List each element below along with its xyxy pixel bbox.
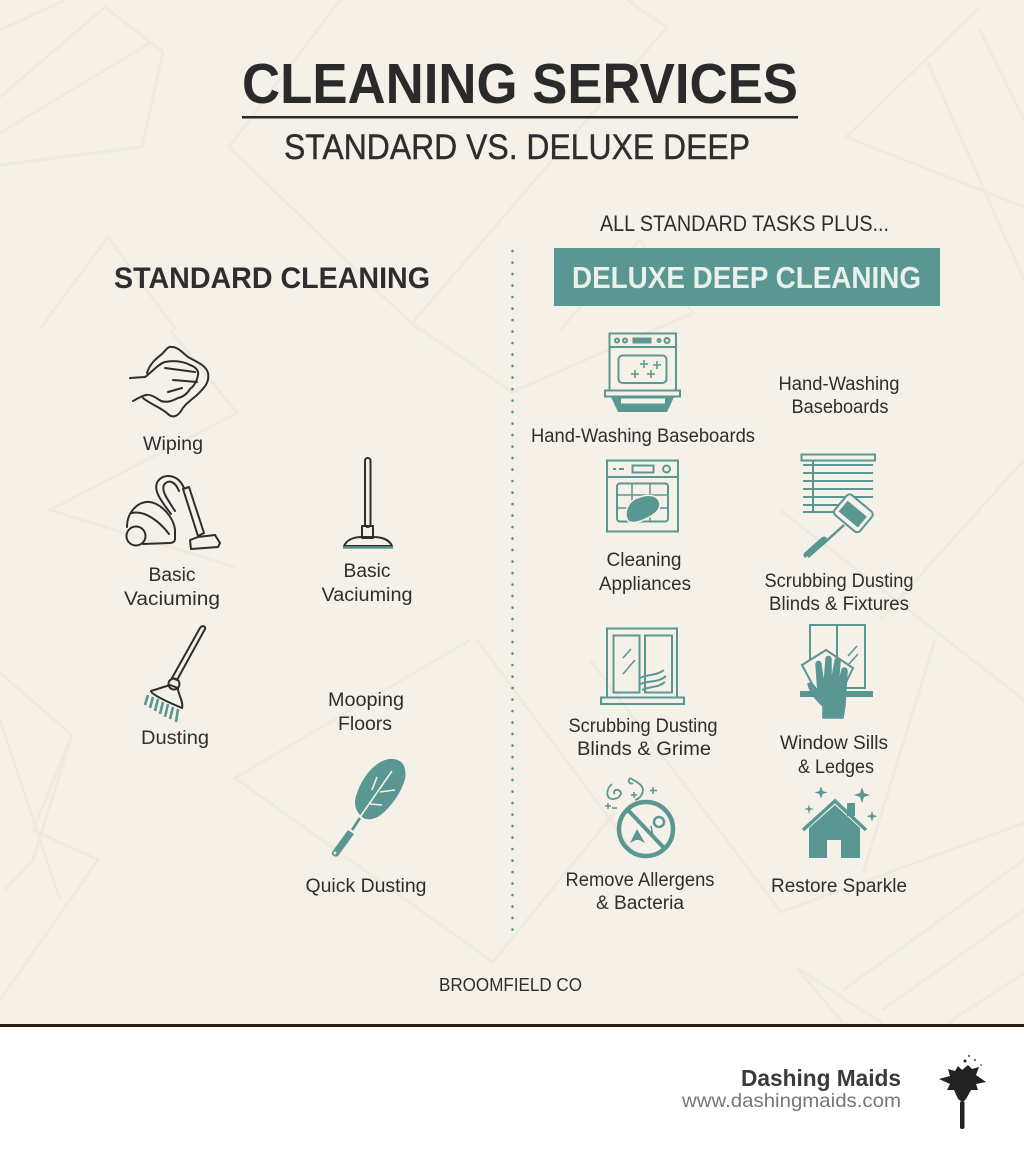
title: CLEANING SERVICES (242, 52, 798, 116)
brand name: Dashing Maids (741, 1065, 901, 1091)
icon: allergen prohibition (605, 778, 673, 856)
icon: floor mop (343, 458, 393, 548)
icon: feather duster (332, 760, 404, 857)
title underline (242, 116, 798, 118)
label: hand-washing baseboards, second: Hand-Washing (778, 374, 900, 395)
heading banner: deluxe deep cleaning (554, 248, 940, 306)
icon: window with cloth (601, 628, 684, 704)
label: dusting: Dusting (141, 728, 209, 749)
panel: standard cleaning items (124, 347, 426, 897)
dotted divider (511, 251, 514, 932)
label: scrubbing dusting blinds and fixtures: Scrubbing Dusting (764, 571, 914, 592)
icon: oven with scrubbing hand (607, 460, 678, 532)
label: cleaning appliances: Appliances (599, 574, 691, 595)
icon: wiping hand and cloth (130, 347, 208, 416)
label: cleaning appliances (599, 550, 691, 595)
label: scrubbing dusting blinds and fixtures (764, 571, 914, 615)
icon: hand wiping window sill (800, 625, 873, 718)
label: remove allergens and bacteria (566, 870, 714, 914)
label: basic vacuuming, second (322, 561, 412, 606)
label: cleaning appliances: Cleaning (606, 550, 682, 571)
label: mopping floors: Mooping (328, 690, 404, 711)
caption: all standard tasks plus: ALL STANDARD TASKS PLUS... (600, 211, 889, 236)
label: hand-washing baseboards, second (778, 374, 900, 418)
heading banner: deluxe deep cleaning: DELUXE DEEP CLEANING (572, 260, 921, 295)
icon: broom (145, 626, 205, 722)
label: mopping floors (328, 690, 404, 735)
label: basic vacuuming: Vaciuming (124, 589, 220, 610)
label: wiping: Wiping (143, 434, 203, 455)
heading: standard cleaning: STANDARD CLEANING (114, 262, 430, 295)
panel: deluxe deep cleaning items (531, 334, 914, 914)
location label: BROOMFIELD CO (439, 975, 582, 995)
label: basic vacuuming: Basic (148, 565, 196, 586)
icon: brand feather duster (939, 1055, 986, 1129)
label: window sills and ledges: Window Sills (780, 733, 888, 754)
footer band (0, 1027, 1024, 1154)
label: basic vacuuming (124, 565, 220, 610)
label: remove allergens and bacteria: & Bacteria (596, 893, 684, 914)
label: quick dusting: Quick Dusting (306, 876, 426, 897)
label: hand-washing baseboards: Hand-Washing Baseboards (531, 426, 755, 447)
label: basic vacuuming, second: Basic (344, 561, 390, 582)
label: window sills and ledges (780, 733, 888, 778)
icon: blinds and scrub brush (802, 454, 875, 560)
label: scrubbing dusting blinds and grime (568, 716, 718, 760)
label: scrubbing dusting blinds and fixtures: Blinds & Fixtures (769, 594, 909, 615)
brand url: www.dashingmaids.com (681, 1090, 901, 1112)
label: remove allergens and bacteria: Remove Allergens (566, 870, 714, 891)
label: basic vacuuming, second: Vaciuming (322, 585, 412, 606)
label: window sills and ledges: & Ledges (798, 757, 874, 778)
label: mopping floors: Floors (338, 714, 392, 735)
label: hand-washing baseboards, second: Baseboards (792, 397, 888, 418)
icon: sparkling oven (605, 334, 680, 412)
label: scrubbing dusting blinds and grime: Scrubbing Dusting (568, 716, 718, 737)
footer rule (0, 1024, 1024, 1027)
icon: canister vacuum (126, 476, 220, 549)
icon: sparkling house (803, 786, 877, 858)
label: scrubbing dusting blinds and grime: Blinds & Grime (577, 739, 711, 760)
label: restore sparkle: Restore Sparkle (771, 876, 907, 897)
subtitle: STANDARD VS. DELUXE DEEP (284, 128, 750, 167)
